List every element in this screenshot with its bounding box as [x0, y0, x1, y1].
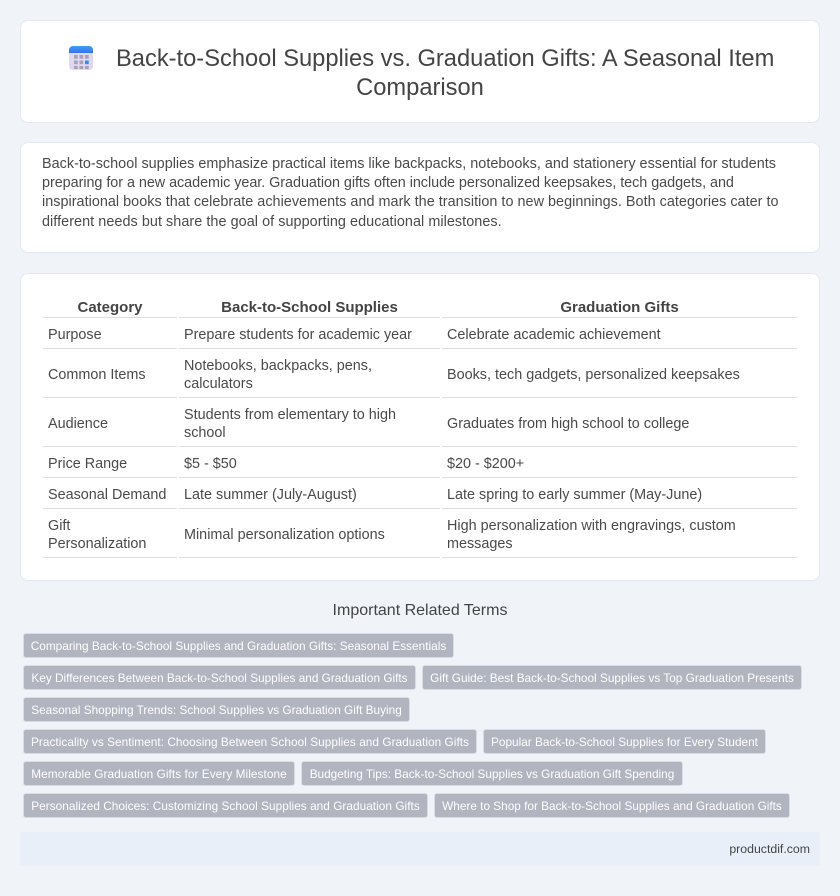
panel: comparison table	[20, 273, 820, 581]
icon: calendar	[69, 46, 93, 70]
tag: Key Differences Between Back-to-School Supplies and Graduation Gifts	[31, 671, 408, 685]
tag	[23, 729, 477, 754]
row: purpose	[48, 327, 661, 343]
intro paragraph: preparing for a new academic year. Graduation gifts often include personalized keepsakes, tech gadgets, and	[42, 175, 734, 191]
row: audience	[48, 407, 689, 441]
row: seasonal demand: Seasonal Demand	[48, 487, 166, 503]
intro paragraph: inspirational books that celebrate achievements and mark the transition to new beginnings. Both categories cater to	[42, 194, 779, 210]
intro paragraph: Back-to-school supplies emphasize practical items like backpacks, notebooks, and stationery essential for students	[42, 156, 776, 172]
tag	[23, 665, 416, 690]
table header row	[77, 299, 679, 316]
row: seasonal demand	[48, 487, 702, 503]
tag: Personalized Choices: Customizing School Supplies and Graduation Gifts	[31, 799, 420, 813]
tag: Seasonal Shopping Trends: School Supplies vs Graduation Gift Buying	[31, 703, 402, 717]
row: common items: Notebooks, backpacks, pens,	[184, 358, 372, 374]
row: gift personalization: Gift	[48, 518, 70, 534]
row: price range: Price Range	[48, 456, 127, 472]
row: gift personalization	[48, 518, 736, 552]
row: gift personalization: Personalization	[48, 536, 146, 552]
tag: Practicality vs Sentiment: Choosing Between School Supplies and Graduation Gifts	[31, 735, 469, 749]
row: seasonal demand: Late spring to early summer (May-June)	[447, 487, 702, 503]
row: gift personalization: messages	[447, 536, 513, 552]
row: price range: $5 - $50	[184, 456, 237, 472]
comparison table	[43, 299, 797, 558]
row: audience: Audience	[48, 416, 108, 432]
tag: Where to Shop for Back-to-School Supplies and Graduation Gifts	[442, 799, 782, 813]
row: price range	[48, 456, 524, 472]
row: purpose: Prepare students for academic year	[184, 327, 412, 343]
row: common items: calculators	[184, 376, 253, 392]
tag: Gift Guide: Best Back-to-School Supplies vs Top Graduation Presents	[430, 671, 794, 685]
tag	[23, 761, 295, 786]
row: audience: school	[184, 425, 226, 441]
intro paragraph: different needs but share the goal of supporting educational milestones.	[42, 214, 502, 230]
table header row: Category	[77, 299, 143, 316]
heading: important related terms: Important Related Terms	[333, 602, 507, 619]
title: Comparison	[356, 75, 484, 101]
row: gift personalization: Minimal personalization options	[184, 527, 385, 543]
row: audience: Graduates from high school to college	[447, 416, 689, 432]
panel: title header	[20, 20, 820, 123]
tag	[23, 633, 454, 658]
related term tags	[23, 633, 802, 818]
row: audience: Students from elementary to high	[184, 407, 396, 423]
tag	[422, 665, 802, 690]
table header row: Back-to-School Supplies	[221, 299, 398, 316]
tag	[434, 793, 790, 818]
tag: Memorable Graduation Gifts for Every Milestone	[31, 767, 287, 781]
intro paragraph	[42, 156, 779, 230]
title: Back-to-School Supplies vs. Graduation Gifts: A Seasonal Item	[116, 46, 774, 72]
row: price range: $20 - $200+	[447, 456, 524, 472]
footer source: productdif.com	[729, 842, 810, 856]
row: gift personalization: High personalization with engravings, custom	[447, 518, 736, 534]
tag: Budgeting Tips: Back-to-School Supplies vs Graduation Gift Spending	[310, 767, 674, 781]
row: common items	[48, 358, 740, 392]
table header row: Graduation Gifts	[560, 299, 679, 316]
row: common items: Books, tech gadgets, personalized keepsakes	[447, 367, 740, 383]
row: purpose: Celebrate academic achievement	[447, 327, 661, 343]
panel: intro text	[20, 142, 820, 253]
title	[116, 46, 774, 101]
tag	[23, 697, 410, 722]
tag	[301, 761, 683, 786]
footer bar	[20, 832, 820, 866]
tag	[23, 793, 428, 818]
tag: Comparing Back-to-School Supplies and Graduation Gifts: Seasonal Essentials	[31, 639, 446, 653]
tag	[483, 729, 766, 754]
row: common items: Common Items	[48, 367, 146, 383]
row: purpose: Purpose	[48, 327, 102, 343]
tag: Popular Back-to-School Supplies for Every Student	[491, 735, 758, 749]
row: seasonal demand: Late summer (July-August)	[184, 487, 357, 503]
